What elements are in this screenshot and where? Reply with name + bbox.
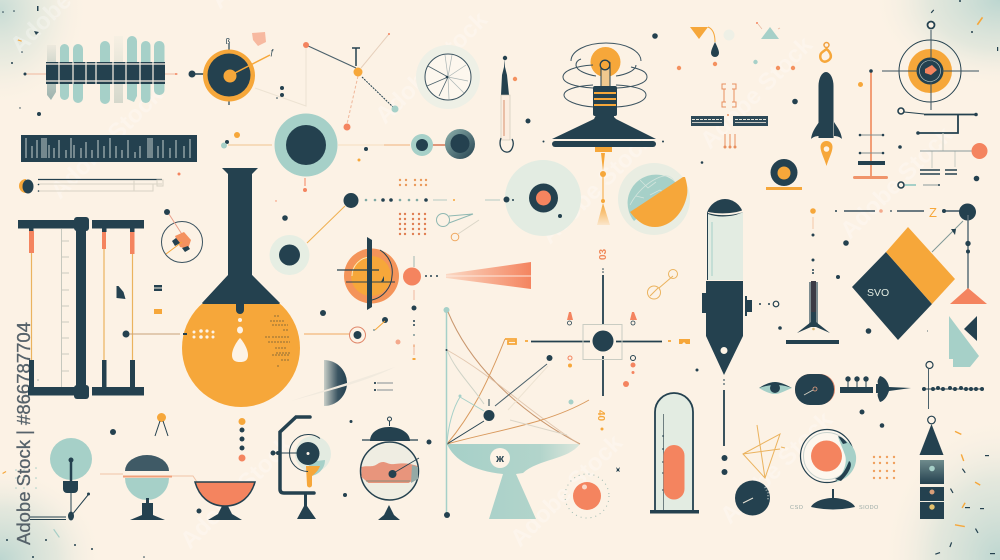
- watermark text: Adobe Stock: [370, 6, 493, 129]
- target dial: ß: [226, 37, 231, 46]
- small chart legend: [19, 179, 163, 194]
- flask: [182, 168, 300, 407]
- watermark text: Adobe Stock: [835, 121, 958, 244]
- teal triangle: [756, 22, 780, 39]
- top right dash line: Z: [929, 205, 937, 220]
- capsule on stand: [650, 393, 699, 514]
- record disc: [504, 160, 581, 236]
- coral triangle: [950, 288, 987, 304]
- measuring rack: [18, 217, 144, 399]
- watermark text: Adobe Stock: [45, 81, 168, 204]
- halo disc: [270, 235, 310, 275]
- small bottom dots: [343, 420, 432, 497]
- coil lamp: [542, 43, 664, 225]
- globe lamp: [100, 455, 197, 520]
- lab stand: [778, 208, 839, 344]
- watermark text: Adobe Stock: [695, 31, 818, 154]
- fan chart with funnel: ж: [495, 453, 504, 465]
- small node dot and link: [275, 193, 358, 243]
- fan chart with funnel: [444, 307, 589, 519]
- dot grids: [399, 179, 427, 235]
- crosshair glyph markers: [567, 312, 637, 387]
- watermark text: Adobe Stock: [175, 431, 298, 554]
- rocket: [811, 42, 842, 166]
- orange world globe: [790, 430, 879, 511]
- crosshair: 03: [598, 248, 609, 260]
- coral diamond: [252, 32, 266, 46]
- watermark text: Adobe Stock: [505, 429, 628, 552]
- dot column: [238, 418, 246, 462]
- eye scanner row: [759, 374, 911, 405]
- gauge disc: [735, 480, 770, 516]
- sun dial: [337, 237, 399, 310]
- gold kite: [743, 425, 785, 478]
- barcode panel: [21, 135, 197, 162]
- flask side connectors: [122, 310, 400, 344]
- clock wheel: [416, 45, 480, 109]
- lidded globe: [360, 417, 419, 520]
- circuit schematic: [898, 108, 988, 188]
- drip funnel: [690, 27, 734, 57]
- target dial: ƒ: [270, 48, 274, 57]
- node network: [37, 33, 398, 130]
- split diamond: SVO: [867, 287, 889, 299]
- orange world globe: CSD: [790, 505, 804, 511]
- orbit dots beside ring: [178, 132, 410, 192]
- crosshair: 40: [595, 410, 606, 422]
- vertical dotted line: [412, 290, 416, 360]
- barcode pill graphic: [24, 36, 178, 104]
- pie globe: [618, 163, 690, 235]
- coral pole stand: [853, 69, 888, 179]
- compass icon: [155, 413, 168, 436]
- optical bracket instrument: [270, 417, 331, 519]
- orange world globe: SIODO: [859, 505, 879, 511]
- coral beam: [403, 256, 531, 289]
- loose dots top: [526, 33, 798, 164]
- small node: [110, 429, 116, 435]
- dotted scale: [860, 362, 984, 428]
- bullseye target top right: [882, 22, 979, 110]
- watermark text: Adobe Stock: [535, 126, 658, 249]
- hook probe: [500, 56, 517, 152]
- vertical stock id text: Adobe Stock | #866787704: [14, 322, 34, 545]
- dotted readout row: [365, 198, 500, 202]
- orange dot grid: [873, 456, 895, 479]
- split diamond: [852, 227, 955, 340]
- yellow dot on pedestal: [766, 159, 802, 190]
- magnifier circle: [162, 209, 202, 262]
- bulb lamp: [30, 438, 92, 520]
- segmented tower: [920, 416, 944, 519]
- target dial: [188, 37, 274, 105]
- coral bowl: [195, 482, 255, 520]
- ruled bars: [691, 84, 768, 148]
- watermark text: Adobe Stock: [715, 406, 838, 529]
- pin icons: [436, 214, 479, 241]
- small dots beside diamond: [866, 328, 928, 334]
- little glyph stack: [116, 285, 162, 314]
- crosshair: [505, 248, 690, 430]
- top right dash line: [835, 204, 976, 290]
- teal wedge shapes: [949, 316, 979, 367]
- sunburst ball: [565, 467, 620, 518]
- bullet tube: [696, 199, 779, 475]
- large teal ring: [274, 114, 338, 176]
- twin discs: [411, 129, 475, 159]
- half disc: [291, 360, 395, 406]
- left bottom detail dots: [15, 467, 60, 538]
- key icon: [648, 270, 678, 299]
